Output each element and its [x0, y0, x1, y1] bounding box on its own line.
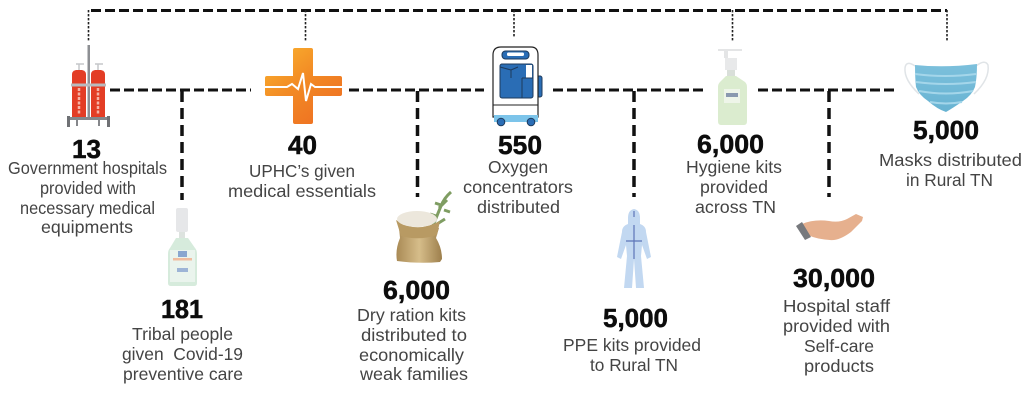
- description: hygiene kits: provided: [700, 177, 768, 197]
- value: 5,000: 5,000: [913, 115, 979, 145]
- description: UPHC: [228, 161, 376, 201]
- icon: open hand: [796, 214, 863, 240]
- description: oxygen concentrators: Oxygen: [488, 157, 548, 177]
- description: hygiene kits: Hygiene kits: [686, 157, 782, 177]
- description: government hospitals: necessary medical: [20, 198, 155, 218]
- icon: oxygen cylinders: [67, 45, 110, 127]
- description: hospital staff: Hospital staff: [783, 296, 890, 316]
- value: 30,000: 30,000: [793, 263, 875, 293]
- description: oxygen concentrators: distributed: [477, 197, 560, 217]
- description: government hospitals: Government hospitals: [8, 158, 167, 178]
- item: PPE kits: [563, 209, 701, 375]
- item: dry ration: [357, 192, 468, 384]
- description: hygiene kits: across TN: [695, 197, 776, 217]
- description: hygiene kits: [686, 157, 782, 217]
- icon: surgical mask: [905, 62, 988, 112]
- description: dry ration: economically: [359, 345, 464, 365]
- item: UPHC: [228, 48, 376, 201]
- description: masks: Masks distributed: [879, 150, 1022, 170]
- icon: pump soap bottle: [718, 49, 747, 125]
- description: UPHC: UPHC’s given: [249, 161, 355, 181]
- middle dashed connector: [110, 90, 898, 200]
- top dashed connector: [88, 10, 947, 42]
- value: 13: 13: [72, 134, 101, 164]
- icon: rice sack: [396, 192, 451, 263]
- item: hospital staff: [783, 214, 890, 376]
- description: UPHC: medical essentials: [228, 181, 376, 201]
- icon: oxygen concentrator: [493, 47, 542, 126]
- description: dry ration: [357, 305, 468, 384]
- value: 6,000: 6,000: [697, 129, 764, 159]
- item: government hospitals: [8, 45, 167, 237]
- description: tribal people: Tribal people: [132, 324, 233, 344]
- item: oxygen concentrators: [463, 47, 573, 217]
- icon: PPE suit: [617, 209, 651, 288]
- description: government hospitals: [8, 158, 167, 237]
- value: 40: 40: [288, 130, 317, 160]
- description: dry ration: weak families: [359, 364, 468, 384]
- value: 550: 550: [498, 130, 542, 160]
- value: 6,000: 6,000: [383, 275, 450, 305]
- description: hospital staff: Self-care: [804, 336, 874, 356]
- description: PPE kits: PPE kits provided: [563, 335, 701, 355]
- description: tribal people: preventive care: [123, 364, 243, 384]
- description: oxygen concentrators: concentrators: [463, 177, 573, 197]
- description: hospital staff: products: [804, 356, 874, 376]
- value: 5,000: 5,000: [603, 303, 668, 333]
- description: dry ration: Dry ration kits: [357, 305, 466, 325]
- description: hospital staff: [783, 296, 890, 376]
- description: masks: in Rural TN: [906, 170, 993, 190]
- description: government hospitals: equipments: [41, 217, 133, 237]
- description: PPE kits: [563, 335, 701, 375]
- description: hospital staff: provided with: [783, 316, 890, 336]
- description: masks: [879, 150, 1022, 190]
- description: dry ration: distributed to: [361, 325, 467, 345]
- description: oxygen concentrators: [463, 157, 573, 217]
- icon: spray sanitizer bottle: [168, 208, 197, 286]
- description: tribal people: [122, 324, 243, 384]
- item: masks: [879, 62, 1022, 190]
- description: tribal people: given Covid-19: [122, 344, 243, 364]
- description: government hospitals: provided with: [40, 178, 136, 198]
- item: tribal people: [122, 208, 243, 384]
- value: 181: 181: [161, 294, 203, 324]
- icon: medical cross with pulse: [265, 48, 342, 124]
- item: hygiene kits: [686, 49, 782, 217]
- description: PPE kits: to Rural TN: [590, 355, 678, 375]
